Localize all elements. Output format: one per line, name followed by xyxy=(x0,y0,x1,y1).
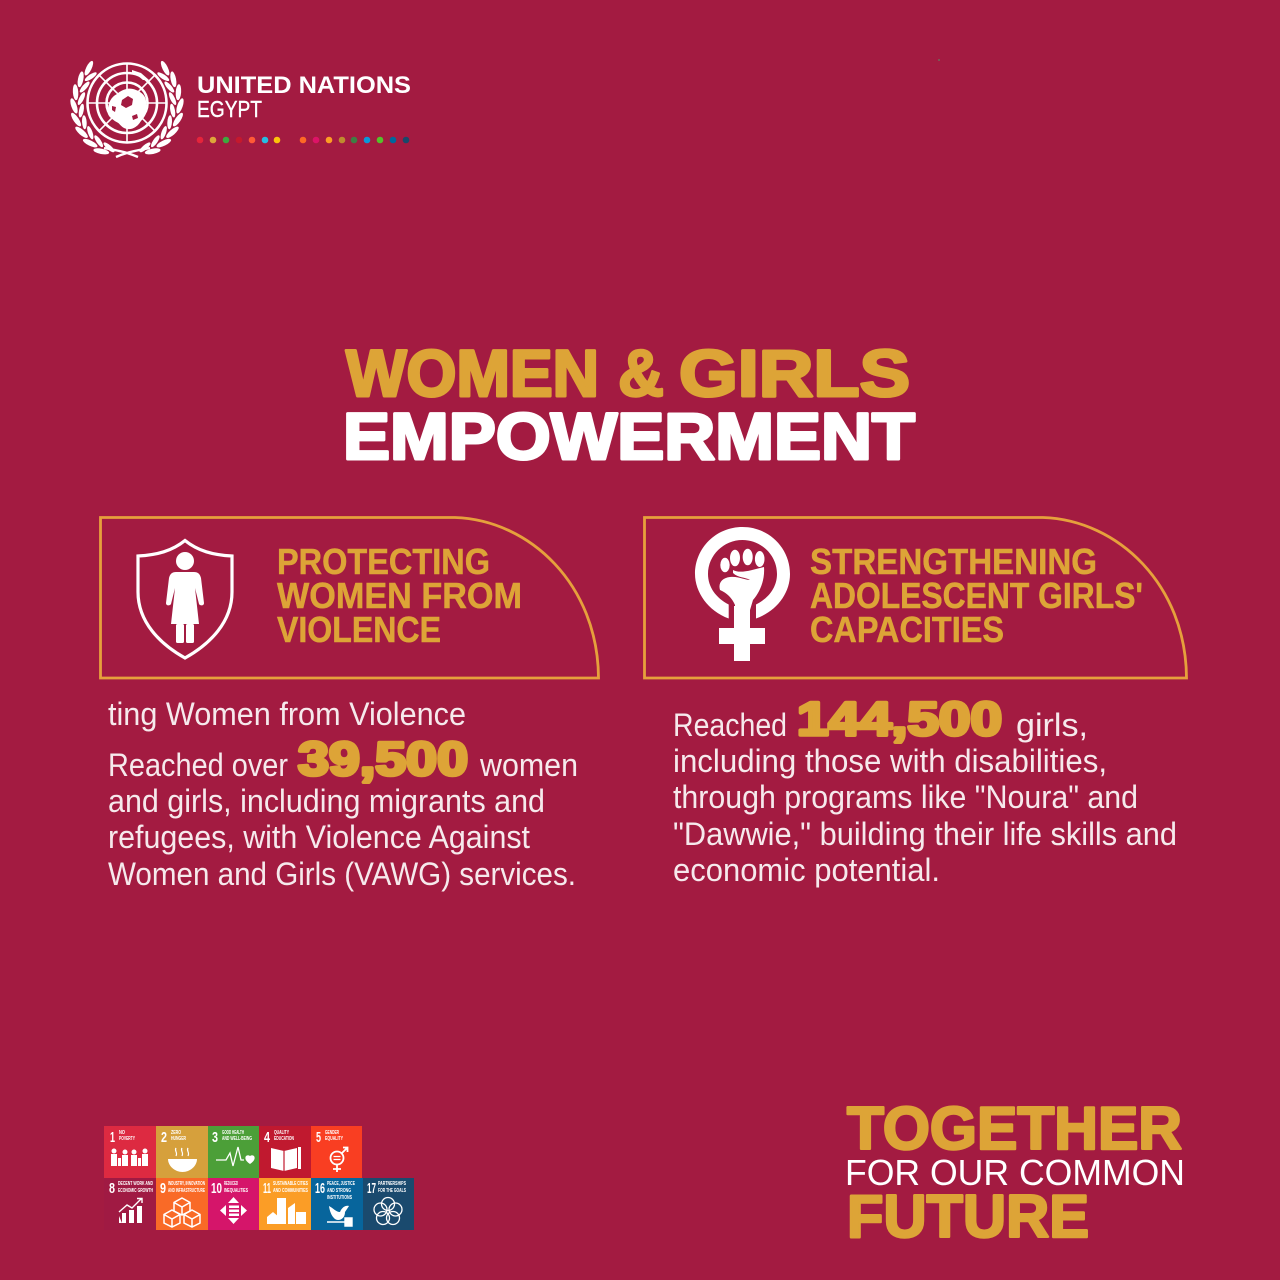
tile: goal 4: QUALITY xyxy=(274,1130,289,1136)
tile: goal 1: 1 xyxy=(110,1129,115,1146)
icon: shield with woman xyxy=(138,540,232,658)
tile: goal 9: AND INFRASTRUCTURE xyxy=(168,1188,205,1194)
SDG colour dots xyxy=(197,137,409,143)
tile: goal 3: GOOD HEALTH xyxy=(222,1130,244,1136)
tile: goal 16: 16 xyxy=(315,1180,325,1197)
text block: girls statistic: economic potential. xyxy=(673,852,940,888)
tile: goal 8 xyxy=(104,1178,156,1230)
tile: goal 8: 8 xyxy=(109,1180,115,1197)
tile: goal 2 xyxy=(156,1126,208,1178)
text block: girls statistic: including those with disabilities, xyxy=(673,743,1107,779)
panel heading: STRENGTHENING xyxy=(810,541,1097,582)
tile: goal 11: 11 xyxy=(263,1180,271,1197)
tile: goal 1: NO xyxy=(119,1130,125,1136)
panel outline xyxy=(644,518,1186,678)
panel heading: PROTECTING xyxy=(277,541,490,582)
tile: goal 10: INEQUALITIES xyxy=(224,1188,248,1194)
tile: goal 11: SUSTAINABLE CITIES xyxy=(273,1181,308,1187)
number: 39,500: 39,500 xyxy=(298,732,468,785)
icon: female symbol with fist xyxy=(695,527,790,661)
tile: goal 11: AND COMMUNITIES xyxy=(273,1188,308,1194)
title: GIRLS xyxy=(679,336,910,410)
tile: goal 2: HUNGER xyxy=(171,1136,186,1142)
tile: goal 3: 3 xyxy=(212,1129,218,1146)
text block: girls statistic: "Dawwie," building their life skills and xyxy=(673,816,1177,852)
title: & xyxy=(618,336,664,410)
tile: goal 4 xyxy=(259,1126,311,1178)
SDG goal tiles xyxy=(104,1126,414,1230)
slogan xyxy=(845,1095,1185,1250)
slogan: FOR OUR COMMON xyxy=(845,1152,1185,1193)
tile: goal 5: EQUALITY xyxy=(325,1136,343,1142)
tile: goal 5: 5 xyxy=(316,1129,321,1146)
tile: goal 10: 10 xyxy=(211,1180,222,1197)
panel outline xyxy=(100,518,598,678)
title: EMPOWERMENT xyxy=(343,399,915,473)
text block: girls statistic xyxy=(673,692,1177,888)
text block: girls statistic: through programs like "Noura" and xyxy=(673,779,1138,815)
text block: women statistic: refugees, with Violence Against xyxy=(108,819,530,855)
tile: goal 17: 17 xyxy=(367,1180,376,1197)
tile: goal 5: GENDER xyxy=(325,1130,339,1136)
icon: UN emblem xyxy=(69,60,185,157)
slogan: FUTURE xyxy=(847,1183,1089,1250)
tile: goal 10 xyxy=(208,1178,259,1230)
tile: goal 4: EDUCATION xyxy=(274,1136,294,1142)
text block: women statistic: and girls, including migrants and xyxy=(108,783,545,819)
title: WOMEN xyxy=(346,336,599,410)
panel heading: CAPACITIES xyxy=(810,609,1004,650)
text block: women statistic: women xyxy=(479,747,578,783)
panel heading: VIOLENCE xyxy=(277,609,441,650)
text block: girls statistic: Reached xyxy=(673,707,787,743)
tile: goal 9 xyxy=(156,1178,208,1230)
UN Egypt logo xyxy=(69,60,411,157)
tile: goal 11 xyxy=(259,1178,311,1230)
tile: goal 2: ZERO xyxy=(171,1130,181,1136)
tile: goal 17: PARTNERSHIPS xyxy=(378,1181,406,1187)
panel heading xyxy=(810,541,1143,650)
tile: goal 16: PEACE, JUSTICE xyxy=(327,1181,355,1187)
text block: girls statistic: girls, xyxy=(1016,707,1088,743)
panel heading: ADOLESCENT GIRLS' xyxy=(810,575,1143,616)
tile: goal 9: 9 xyxy=(160,1180,166,1197)
panel: strengthening adolescent girls xyxy=(644,518,1186,678)
tile: goal 16: AND STRONG xyxy=(327,1188,351,1194)
tile: goal 10: REDUCED xyxy=(224,1181,238,1187)
tile: goal 3: AND WELL-BEING xyxy=(222,1136,252,1142)
tile: goal 5 xyxy=(311,1126,362,1178)
country name: EGYPT xyxy=(197,96,262,122)
panel heading: WOMEN FROM xyxy=(277,575,522,616)
tile: goal 3 xyxy=(208,1126,259,1178)
panel: protecting women from violence xyxy=(100,518,598,678)
tile: goal 1 xyxy=(104,1126,156,1178)
tile: goal 17: FOR THE GOALS xyxy=(378,1188,406,1194)
text block: women statistic: Reached over xyxy=(108,747,288,783)
tile: goal 4: 4 xyxy=(264,1129,270,1146)
text block: women statistic: Women and Girls (VAWG) services. xyxy=(108,856,576,892)
tile: goal 8: ECONOMIC GROWTH xyxy=(118,1188,153,1194)
text block: women statistic xyxy=(108,696,578,892)
text block: women statistic: ting Women from Violence xyxy=(108,696,466,732)
slogan: TOGETHER xyxy=(847,1095,1182,1162)
tile: goal 1: POVERTY xyxy=(119,1136,135,1142)
tile: goal 2: 2 xyxy=(161,1129,167,1146)
tile: goal 16 xyxy=(311,1178,363,1230)
number: 144,500: 144,500 xyxy=(797,692,1002,745)
tile: goal 8: DECENT WORK AND xyxy=(118,1181,153,1187)
tile: goal 9: INDUSTRY, INNOVATION xyxy=(168,1181,205,1187)
panel heading xyxy=(277,541,522,650)
tile: goal 16: INSTITUTIONS xyxy=(327,1195,352,1201)
tile: goal 17 xyxy=(363,1178,414,1230)
organisation name: UNITED NATIONS xyxy=(197,72,411,99)
title xyxy=(343,336,915,473)
